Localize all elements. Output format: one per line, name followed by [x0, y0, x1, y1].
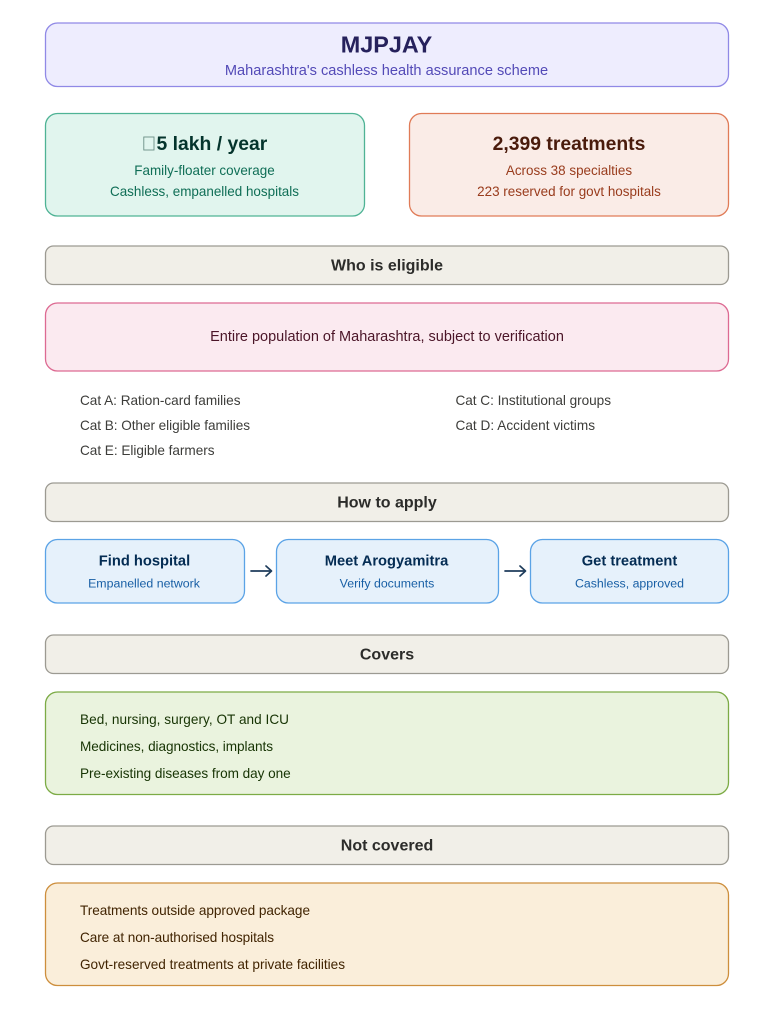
panel: covered items: Pre-existing diseases from day one	[80, 766, 291, 781]
step: find hospital: Find hospital	[99, 554, 190, 570]
panel: covered items	[46, 692, 728, 794]
arrow: step two to three	[505, 566, 526, 576]
stat heading: 5 lakh per year: 5 lakh / year	[156, 133, 268, 155]
list: beneficiary categories: Cat C: Institutional groups	[456, 393, 611, 408]
treatment details	[477, 163, 661, 199]
heading: who is eligible	[46, 246, 728, 284]
step: meet arogyamitra	[276, 540, 498, 603]
list: beneficiary categories: Cat D: Accident victims	[456, 418, 595, 433]
heading: covers	[46, 635, 728, 674]
treatment details: 223 reserved for govt hospitals	[477, 184, 661, 199]
title: MJPJAY	[341, 32, 433, 58]
step: get treatment: Get treatment	[582, 554, 677, 570]
panel: eligibility: Entire population of Maharashtra, subject to verification	[210, 329, 564, 345]
list: beneficiary categories	[80, 393, 611, 458]
panel: coverage amount	[46, 114, 364, 216]
heading: who is eligible: Who is eligible	[331, 258, 443, 274]
coverage details: Family-floater coverage	[134, 163, 275, 178]
panel: covered items: Medicines, diagnostics, implants	[80, 739, 273, 754]
heading: not covered	[46, 826, 728, 864]
list: beneficiary categories: Cat A: Ration-card families	[80, 393, 241, 408]
heading: covers: Covers	[360, 646, 414, 664]
heading: how to apply	[46, 483, 728, 522]
arrow: step one to two	[251, 566, 272, 576]
panel: excluded items: Care at non-authorised hospitals	[80, 930, 274, 945]
panel: excluded items: Treatments outside approved package	[80, 903, 310, 918]
list: beneficiary categories: Cat B: Other eligible families	[80, 418, 250, 433]
list: beneficiary categories: Cat E: Eligible farmers	[80, 443, 215, 458]
stat heading: treatments: 2,399 treatments	[493, 133, 645, 155]
step: find hospital: Empanelled network	[88, 576, 201, 590]
step: find hospital	[46, 540, 244, 603]
heading: how to apply: How to apply	[337, 494, 437, 512]
subtitle: Maharashtra's cashless health assurance scheme	[225, 63, 548, 79]
panel: excluded items	[46, 883, 728, 986]
step: get treatment	[530, 540, 728, 603]
step: meet arogyamitra: Meet Arogyamitra	[325, 554, 449, 570]
title panel	[46, 23, 728, 86]
coverage details: Cashless, empanelled hospitals	[110, 184, 299, 199]
panel: eligibility	[46, 303, 728, 371]
coverage details	[110, 163, 299, 199]
step: meet arogyamitra: Verify documents	[340, 576, 434, 590]
panel: treatments	[410, 114, 728, 216]
step: get treatment: Cashless, approved	[575, 576, 684, 590]
treatment details: Across 38 specialties	[506, 163, 632, 178]
heading: not covered: Not covered	[341, 838, 433, 854]
panel: covered items: Bed, nursing, surgery, OT and ICU	[80, 712, 289, 727]
panel: excluded items: Govt-reserved treatments at private facilities	[80, 957, 345, 972]
